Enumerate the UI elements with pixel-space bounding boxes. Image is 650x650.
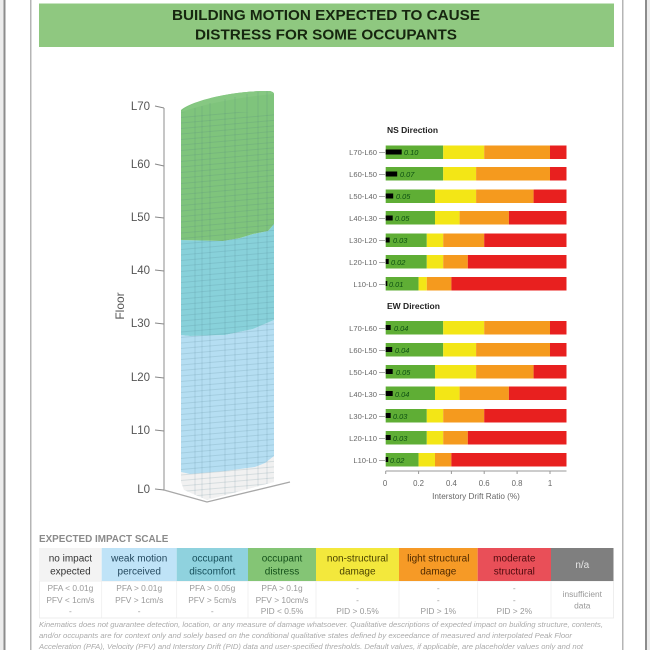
column: occupant distress: PFV > 10cm/s: [256, 595, 308, 605]
drift ratio axis: 1: [548, 479, 552, 488]
column: weak motion perceived: -: [138, 606, 141, 616]
column: n/a: data: [574, 600, 591, 610]
floor axis: [113, 101, 290, 502]
row L70-L60: L70-L60: [349, 148, 377, 157]
column: no impact expected: expected: [50, 566, 91, 578]
column: occupant distress: PFA > 0.1g: [261, 583, 303, 593]
top cap: [181, 91, 274, 112]
row L20-L10: [349, 255, 566, 268]
row L70-L60: L70-L60: [349, 324, 377, 333]
floor axis: L10: [131, 425, 150, 437]
floor axis: L60: [131, 159, 150, 171]
row L60-L50: 0.04: [395, 346, 409, 355]
drift ratio axis: [383, 471, 566, 501]
heading: expected impact scale: EXPECTED IMPACT SCALE: [39, 534, 169, 545]
column: non-structural damage: [316, 548, 399, 616]
row L30-L20: L30-L20: [349, 412, 377, 421]
row L40-L30: [349, 211, 566, 224]
row L60-L50: 0.07: [400, 170, 415, 179]
row L40-L30: [349, 386, 566, 400]
row L10-L0: L10-L0: [353, 280, 377, 289]
column: non-structural damage: -: [356, 595, 359, 605]
floor axis: L50: [131, 212, 150, 224]
column: occupant discomfort: discomfort: [189, 566, 236, 578]
column: weak motion perceived: PFV > 1cm/s: [115, 595, 163, 605]
column: weak motion perceived: weak motion: [110, 554, 167, 564]
column: light structural damage: PID > 1%: [420, 606, 457, 616]
floor axis: L30: [131, 318, 150, 330]
floor axis: L40: [131, 265, 150, 277]
row L60-L50: [349, 343, 566, 356]
row L30-L20: 0.03: [393, 412, 408, 421]
column: no impact expected: no impact: [49, 554, 92, 564]
column: occupant discomfort: PFA > 0.05g: [189, 583, 236, 593]
column: weak motion perceived: PFA > 0.01g: [116, 583, 162, 593]
row L20-L10: L20-L10: [349, 434, 377, 443]
zone: occupant distress: [181, 91, 274, 241]
column: moderate structural: PID > 2%: [496, 606, 533, 616]
column: n/a: insufficient: [563, 589, 603, 599]
column: occupant discomfort: -: [211, 606, 214, 616]
floor axis: L20: [131, 372, 150, 384]
column: moderate structural: [478, 548, 551, 616]
column: non-structural damage: non-structural: [327, 554, 388, 564]
column: light structural damage: -: [437, 583, 440, 593]
column: n/a: n/a: [575, 560, 590, 571]
column: no impact expected: -: [69, 606, 72, 616]
title banner: DISTRESS FOR SOME OCCUPANTS: [195, 27, 457, 44]
column: no impact expected: PFA < 0.01g: [47, 583, 94, 593]
column: non-structural damage: PID > 0.5%: [336, 606, 379, 616]
chart: EW direction: [349, 301, 566, 466]
column: non-structural damage: -: [356, 583, 359, 593]
axis title: Interstory Drift Ratio (%): [432, 492, 520, 501]
column: occupant distress: [248, 548, 316, 616]
row L30-L20: [349, 409, 566, 422]
floor axis: L70: [131, 101, 150, 113]
column: weak motion perceived: [102, 548, 177, 616]
column: no impact expected: PFV < 1cm/s: [46, 595, 94, 605]
row L20-L10: L20-L10: [349, 258, 377, 267]
drift ratio axis: 0.2: [413, 479, 424, 488]
row L70-L60: 0.10: [404, 148, 419, 157]
column: light structural damage: light structural: [407, 554, 469, 564]
row L30-L20: 0.03: [393, 236, 408, 245]
row L60-L50: [349, 167, 566, 180]
row L60-L50: L60-L50: [349, 346, 377, 355]
impact scale table: [39, 548, 614, 618]
row L20-L10: [349, 431, 566, 444]
row L30-L20: [349, 234, 566, 247]
row L40-L30: 0.04: [395, 390, 409, 399]
column: occupant discomfort: occupant: [192, 554, 233, 564]
disclaimer text: [38, 622, 603, 650]
drift ratio axis: 0.6: [479, 479, 490, 488]
row L20-L10: 0.02: [391, 258, 405, 267]
drift ratio axis: 0.4: [446, 479, 457, 488]
column: occupant distress: distress: [265, 566, 299, 578]
row L20-L10: 0.03: [393, 434, 408, 443]
row L50-L40: L50-L40: [349, 192, 377, 201]
column: occupant distress: PID < 0.5%: [261, 606, 304, 616]
row L10-L0: L10-L0: [353, 456, 377, 465]
base zone: no impact: [181, 456, 274, 500]
row L40-L30: 0.05: [395, 214, 410, 223]
row L10-L0: 0.02: [390, 456, 404, 465]
column: light structural damage: damage: [420, 566, 457, 578]
chart: NS direction: [349, 125, 566, 290]
row L60-L50: L60-L50: [349, 170, 377, 179]
column: no impact expected: [39, 548, 102, 616]
row L30-L20: L30-L20: [349, 236, 377, 245]
column: occupant discomfort: PFV > 5cm/s: [188, 595, 236, 605]
row L50-L40: 0.05: [396, 192, 411, 201]
column: light structural damage: -: [437, 595, 440, 605]
wireframe grid: [181, 91, 274, 502]
building model: [181, 91, 274, 502]
drift ratio axis: 0.8: [512, 479, 523, 488]
heading: EW Direction: EW Direction: [387, 301, 440, 311]
column: moderate structural: -: [513, 595, 516, 605]
row L70-L60: [349, 321, 566, 334]
disclaimer text: and/or occupants are for context only and solely based on the conditional qualitative states defined by exceedance of measured and interpolated Peak Floor: [39, 633, 573, 640]
row L50-L40: 0.05: [396, 368, 411, 377]
column: moderate structural: structural: [494, 566, 535, 578]
title banner: BUILDING MOTION EXPECTED TO CAUSE: [172, 7, 480, 24]
row L10-L0: 0.01: [389, 280, 403, 289]
row L40-L30: L40-L30: [349, 214, 377, 223]
column: n/a: [551, 548, 614, 610]
column: occupant distress: occupant: [262, 554, 303, 564]
column: non-structural damage: damage: [339, 566, 376, 578]
column: occupant discomfort: [177, 548, 248, 616]
row L50-L40: L50-L40: [349, 368, 377, 377]
row L40-L30: L40-L30: [349, 390, 377, 399]
row L70-L60: 0.04: [394, 324, 408, 333]
floor axis: Floor: [113, 292, 127, 320]
row L50-L40: [349, 190, 566, 203]
column: moderate structural: moderate: [493, 554, 536, 564]
row L10-L0: [353, 453, 566, 466]
column: moderate structural: -: [513, 583, 516, 593]
column: light structural damage: [399, 548, 478, 616]
row L70-L60: [349, 146, 566, 159]
row L10-L0: [353, 277, 566, 290]
floor axis: L0: [137, 484, 150, 496]
column: weak motion perceived: perceived: [118, 566, 161, 578]
disclaimer text: Kinematics does not guarantee detection, location, or any measure of damage whatsoever. Qualitative descriptions of expected impact on building structure, contents,: [39, 622, 603, 629]
drift ratio axis: 0: [383, 479, 388, 488]
heading: NS Direction: NS Direction: [387, 125, 438, 135]
zone: weak motion perceived: [181, 320, 274, 474]
zone: occupant discomfort: [181, 224, 274, 336]
title banner: [39, 4, 614, 47]
row L50-L40: [349, 365, 566, 378]
